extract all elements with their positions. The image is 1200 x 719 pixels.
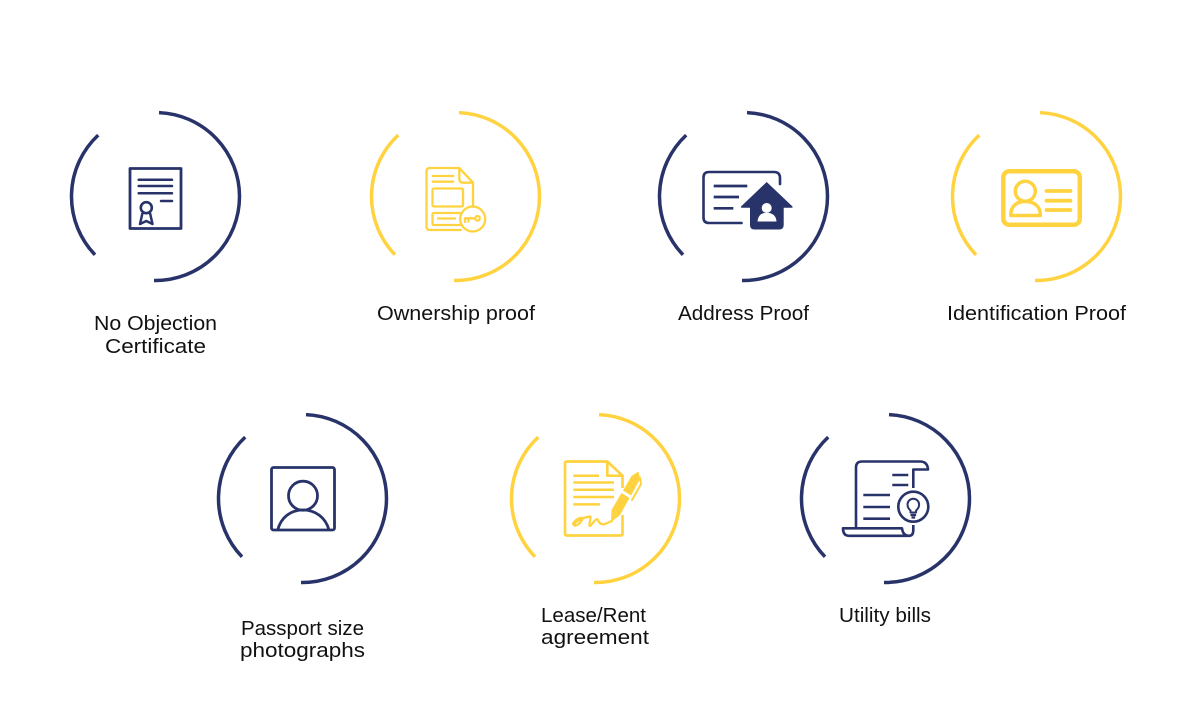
label: Address Proof <box>678 303 809 325</box>
ring: navy <box>218 415 386 583</box>
panel: Address Proof <box>659 113 828 325</box>
label: agreement <box>541 627 649 649</box>
label <box>541 605 649 649</box>
panel: Lease/Rent agreement <box>511 415 680 649</box>
label: Identification Proof <box>947 303 1126 325</box>
label <box>240 618 365 662</box>
label: Ownership proof <box>377 303 535 325</box>
icon: agreement with pen <box>565 462 641 536</box>
ring: yellow <box>952 113 1120 281</box>
panel: Ownership proof <box>371 113 540 325</box>
panel: Utility bills <box>801 415 970 627</box>
icon: portrait photo <box>272 468 334 530</box>
label: No Objection <box>94 313 217 335</box>
panel: No Objection Certificate <box>71 113 240 358</box>
label: Passport size <box>241 618 364 640</box>
icon: document with key <box>426 168 485 232</box>
ring: yellow <box>511 415 680 583</box>
label: Lease/Rent <box>541 605 646 627</box>
ring: navy <box>801 415 970 583</box>
icon: scroll bill with light bulb <box>843 462 928 536</box>
panel: Identification Proof <box>947 113 1126 325</box>
ring: yellow <box>371 113 540 281</box>
ring: navy <box>659 113 828 281</box>
label: Certificate <box>105 336 206 358</box>
ring: navy <box>71 113 240 281</box>
icon: ID card <box>1003 171 1080 225</box>
icon: certificate <box>130 168 181 228</box>
label <box>94 313 217 358</box>
label: photographs <box>240 640 365 662</box>
label: Utility bills <box>839 605 931 627</box>
panel: Passport size photographs <box>218 415 386 662</box>
icon: address card with house <box>704 172 793 230</box>
